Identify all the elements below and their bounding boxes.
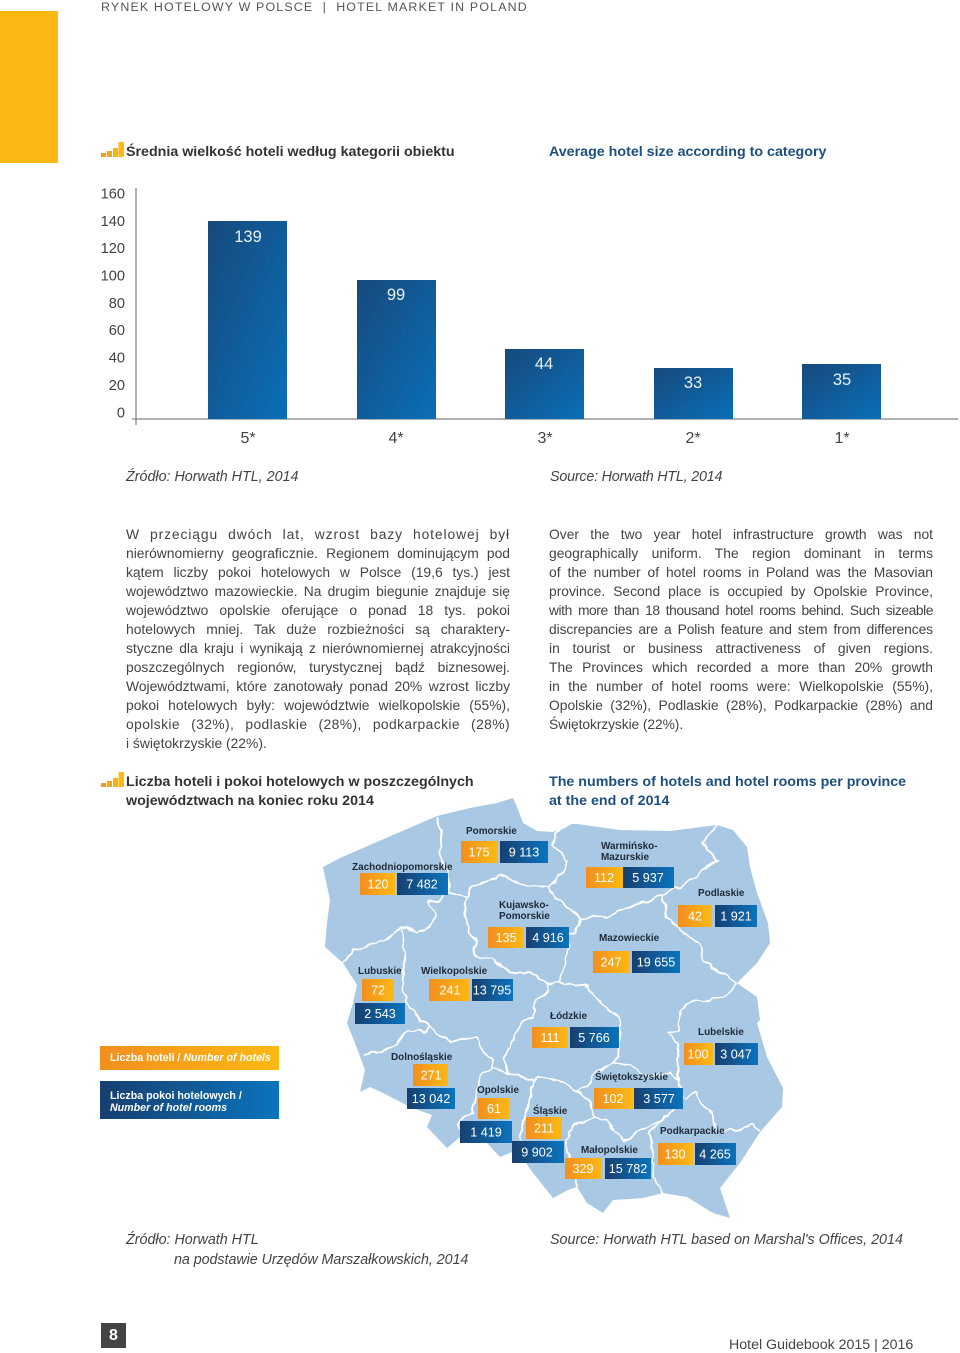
province names: Pomorskie: [466, 826, 517, 837]
heading: English map title: [549, 774, 906, 808]
province names: Łódzkie: [550, 1011, 587, 1022]
province values: 61: [487, 1102, 501, 1116]
province values: 15 782: [609, 1162, 647, 1176]
province values: 271: [420, 1068, 442, 1082]
province names: Kujawsko-: [499, 900, 549, 911]
province values: 120: [367, 878, 389, 892]
text block: Polish: opolskie (32%), podlaskie (28%), podkarpackie (28%): [126, 716, 510, 732]
province names: [352, 826, 745, 1156]
text block: Polish: pokoi hotelowych były: województwie wielkopolskie (55%),: [126, 697, 510, 713]
province names: Pomorskie: [499, 911, 550, 922]
bar chart: 0: [117, 406, 125, 422]
bar chart: 33: [684, 374, 702, 392]
heading: Polish map title: województwach na koniec roku 2014: [126, 792, 374, 808]
map of Poland: [323, 798, 783, 1218]
text block: Polish: hotelowych mniej. Tak duże rozbieżności są charaktery-: [126, 621, 510, 637]
yellow corner tab: [0, 11, 58, 163]
province values: 13 795: [473, 984, 511, 998]
source: Polish map: [126, 1231, 468, 1268]
province values: 42: [688, 910, 702, 924]
province values: 5 937: [632, 871, 664, 885]
heading: English chart title: Average hotel size according to category: [549, 144, 826, 160]
text block: Polish: i świętokrzyskie (22%).: [126, 735, 267, 751]
province names: Lubelskie: [698, 1027, 744, 1038]
bar chart: 44: [535, 355, 553, 373]
province names: Podkarpackie: [660, 1126, 725, 1137]
province values: 329: [572, 1162, 594, 1176]
bar chart: 139: [234, 228, 262, 246]
province values: 19 655: [637, 956, 675, 970]
province names: Śląskie: [533, 1105, 568, 1117]
heading: Polish chart title: Średnia wielkość hoteli według kategorii obiektu: [126, 144, 455, 160]
province names: Wielkopolskie: [421, 966, 488, 977]
heading: English map title: at the end of 2014: [549, 792, 669, 808]
text block: Polish: W przeciągu dwóch lat, wzrost bazy hotelowej był: [126, 526, 510, 542]
province names: Warmińsko-: [601, 841, 658, 852]
legend: number of hotels: Liczba hoteli / Number of hotels: [110, 1052, 271, 1064]
province values: 135: [495, 931, 517, 945]
bar chart: 99: [387, 286, 405, 304]
text block: English: geographically uniform. The region dominant in terms: [549, 545, 933, 561]
province values: 13 042: [412, 1092, 450, 1106]
province borders: [343, 816, 760, 1193]
text block: English: Opolskie (32%), Podlaskie (28%), Podkarpackie (28%) and: [549, 697, 933, 713]
province values: 175: [468, 846, 490, 860]
province names: Mazowieckie: [599, 933, 660, 944]
province values: 2 543: [364, 1007, 396, 1021]
legend: number of hotel rooms: Number of hotel rooms: [110, 1102, 227, 1114]
text block: English: The Provinces which recorded a more than 20% growth: [549, 659, 933, 675]
footer title: Hotel Guidebook 2015 | 2016: [729, 1337, 913, 1353]
bar chart: 35: [833, 371, 851, 389]
province values: 1 921: [720, 910, 752, 924]
province values: 3 047: [720, 1048, 752, 1062]
bar chart: 3*: [537, 430, 553, 447]
heading: English map title: The numbers of hotels and hotel rooms per province: [549, 774, 906, 790]
province values: 241: [439, 984, 461, 998]
text block: Polish: poszczególnych regionów, turystycznej bądź biznesowej.: [126, 659, 510, 675]
province values: 247: [600, 956, 622, 970]
legend: number of hotel rooms: Liczba pokoi hotelowych /: [110, 1090, 242, 1102]
running header: RYNEK HOTELOWY W POLSCE | HOTEL MARKET IN POLAND: [101, 0, 528, 14]
source: Polish chart: Źródło: Horwath HTL, 2014: [126, 469, 298, 485]
text block: Polish: województwo opolskie oferujące o ponad 18 tys. pokoi: [126, 602, 510, 618]
bar chart: 60: [109, 323, 125, 339]
province values: 9 902: [521, 1146, 553, 1160]
province names: Świętokszyskie: [595, 1071, 668, 1083]
province values: 5 766: [578, 1031, 610, 1045]
bar chart: 5*: [240, 430, 256, 447]
page number: [101, 1323, 126, 1348]
province names: Podlaskie: [698, 888, 745, 899]
text block: Polish: [126, 526, 510, 751]
bar chart: 40: [109, 350, 125, 366]
province names: Zachodniopomorskie: [352, 862, 453, 873]
text block: Polish: nierównomierny geograficznie. Regionem dominującym pod: [126, 545, 510, 561]
text block: Polish: kątem liczby pokoi hotelowych w Polsce (19,6 tys.) jest: [126, 564, 510, 580]
text block: English: discrepancies are a Polish feature and stem from differences: [549, 621, 933, 637]
page number: 8: [109, 1327, 118, 1344]
legend: number of hotels: [100, 1046, 279, 1070]
province data boxes: [355, 841, 758, 1179]
bar chart: 120: [101, 241, 125, 257]
text block: English: in the number of hotel rooms were: Wielkopolskie (55%),: [549, 678, 933, 694]
text block: English: Świętokrzyskie (22%).: [549, 716, 683, 732]
heading: Polish map title: [126, 774, 474, 808]
province names: Mazurskie: [601, 852, 650, 863]
legend: number of hotel rooms: [100, 1081, 279, 1119]
province names: Lubuskie: [358, 966, 402, 977]
source: English chart: Source: Horwath HTL, 2014: [550, 469, 722, 485]
bar chart: 1*: [834, 430, 850, 447]
bar chart: 140: [101, 214, 125, 230]
icon: signal bars: [101, 772, 124, 787]
bar chart: 4*: [388, 430, 404, 447]
icon: signal bars: [101, 142, 124, 157]
province values: 7 482: [406, 878, 438, 892]
country outline: [323, 798, 783, 1218]
text block: Polish: Województwami, które zanotowały ponad 20% wzrost liczby: [126, 678, 510, 694]
bar chart: 2*: [685, 430, 701, 447]
province values: 100: [687, 1048, 709, 1062]
text block: English: in tourist or business attractiveness of given regions.: [549, 640, 933, 656]
text block: English: province. Second place is occupied by Opolskie Province,: [549, 583, 933, 599]
province names: Małopolskie: [581, 1145, 638, 1156]
province values: 102: [602, 1092, 624, 1106]
bar chart: 100: [101, 268, 125, 284]
province values: 1 419: [470, 1126, 502, 1140]
bar chart: 80: [109, 296, 125, 312]
province values: 130: [664, 1148, 686, 1162]
province values: 9 113: [509, 846, 539, 860]
text block: Polish: styczne dla kraju i wynikają z nierównomiernej atrakcyjności: [126, 640, 510, 656]
province values: [364, 846, 752, 1176]
text block: Polish: województwo mazowieckie. Na drugim biegunie znajduje się: [126, 583, 510, 599]
source: English map: Source: Horwath HTL based on Marshal's Offices, 2014: [550, 1232, 903, 1248]
heading: Polish map title: Liczba hoteli i pokoi hotelowych w poszczególnych: [126, 774, 474, 790]
province values: 211: [534, 1122, 554, 1136]
province names: Opolskie: [477, 1085, 519, 1096]
province values: 4 916: [532, 931, 564, 945]
province names: Dolnośląskie: [391, 1052, 453, 1063]
text block: English: [549, 526, 933, 732]
text block: English: Over the two year hotel infrastructure growth was not: [549, 526, 933, 542]
province values: 112: [594, 871, 614, 885]
source: Polish map: Źródło: Horwath HTL: [126, 1232, 259, 1248]
province values: 3 577: [643, 1092, 675, 1106]
bar chart: [101, 186, 958, 447]
text block: English: with more than 18 thousand hotel rooms behind. Such sizeable: [549, 602, 933, 618]
bar chart: 20: [109, 378, 125, 394]
province values: 111: [540, 1031, 560, 1045]
bar chart: 160: [101, 186, 125, 202]
source: Polish map: na podstawie Urzędów Marszałkowskich, 2014: [174, 1252, 468, 1268]
text block: English: of the number of hotel rooms in Poland was the Masovian: [549, 564, 933, 580]
province values: 72: [371, 984, 385, 998]
province values: 4 265: [699, 1148, 731, 1162]
